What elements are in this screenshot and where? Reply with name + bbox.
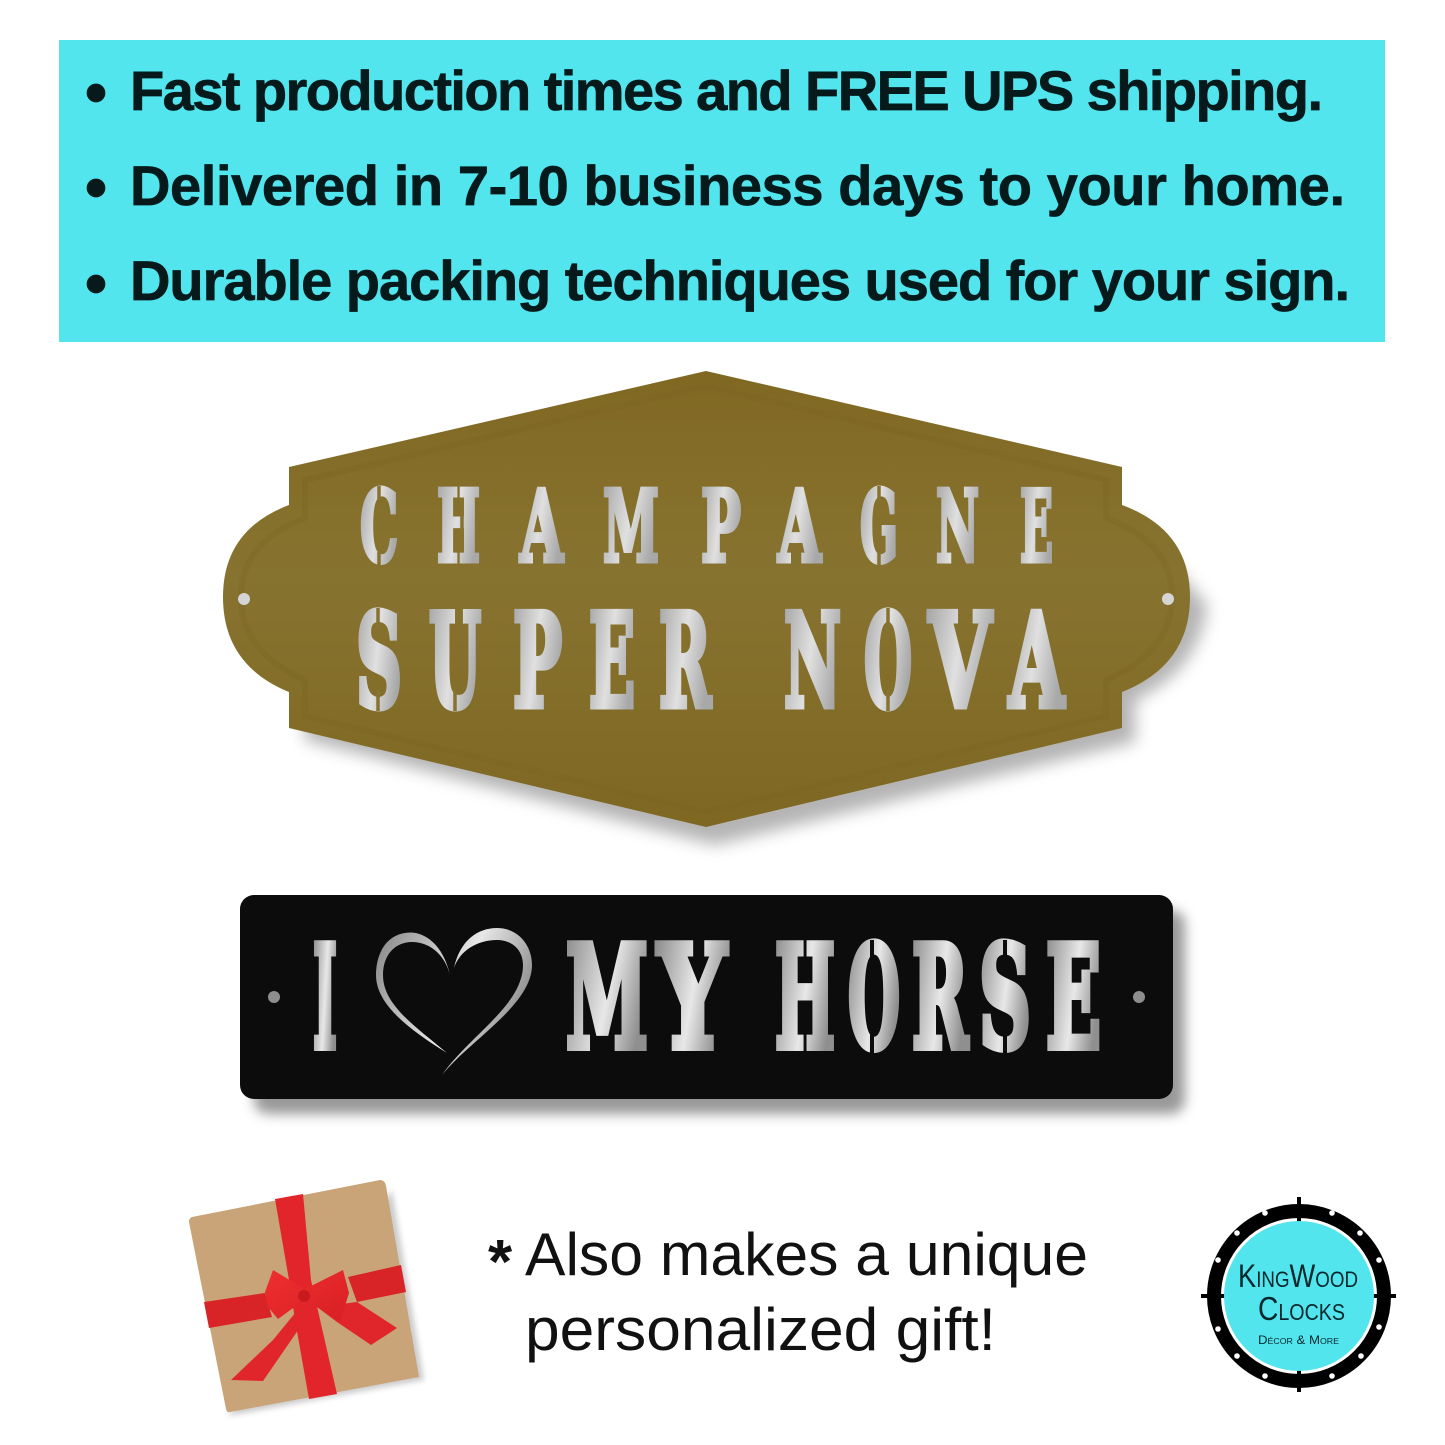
text: I MY HORSE: I <box>313 916 337 1081</box>
sign: I love my horse <box>240 895 1185 1114</box>
sign: Champagne Super Nova <box>223 371 1207 845</box>
logo: KingWood Clocks <box>1201 1197 1396 1392</box>
text: SUPER NOVA: E <box>589 587 635 737</box>
callout: gift note: * <box>488 1228 513 1297</box>
bullet list: Fast production times and FREE UPS shipping. <box>130 59 1323 122</box>
callout: gift note <box>488 1221 1088 1363</box>
text: I MY HORSE: O <box>848 916 900 1081</box>
text: CHAMPAGNE: P <box>701 470 741 585</box>
mounting holes <box>238 593 1174 605</box>
bow <box>231 1302 397 1381</box>
callout: gift note: Also makes a unique <box>525 1221 1088 1288</box>
text: I MY HORSE: R <box>912 916 968 1081</box>
text: CHAMPAGNE <box>360 470 1053 585</box>
text: CHAMPAGNE: H <box>437 470 480 585</box>
icon: heart <box>376 928 532 1075</box>
logo text: KingWood <box>1238 1258 1358 1294</box>
logo text: Décor & More <box>1258 1333 1339 1347</box>
text: CHAMPAGNE: C <box>360 470 398 585</box>
sign: Champagne Super Nova: E <box>1020 470 1053 585</box>
ribbon <box>275 1194 337 1399</box>
text: SUPER NOVA: R <box>659 587 712 737</box>
text: CHAMPAGNE: A <box>519 470 564 585</box>
text: SUPER NOVA: V <box>928 587 993 737</box>
text: CHAMPAGNE: G <box>860 470 898 585</box>
text: SUPER NOVA: U <box>429 587 481 737</box>
text: SUPER NOVA: O <box>864 587 912 737</box>
text: I MY HORSE: Y <box>657 916 727 1081</box>
text: CHAMPAGNE: N <box>936 470 979 585</box>
text: I MY HORSE: M <box>566 916 648 1081</box>
panel: shipping benefits <box>59 40 1385 342</box>
text: SUPER NOVA <box>356 587 1065 737</box>
text: SUPER NOVA: P <box>513 587 562 737</box>
callout: gift note: personalized gift! <box>525 1296 996 1363</box>
bullet list: Durable packing techniques used for your sign. <box>130 249 1350 312</box>
logo text <box>1238 1258 1358 1347</box>
mounting holes <box>268 991 1145 1003</box>
text: CHAMPAGNE: M <box>603 470 659 585</box>
text: I MY HORSE: S <box>979 916 1031 1081</box>
logo text: Clocks <box>1258 1290 1345 1327</box>
bullet list <box>87 59 1350 312</box>
text: I MY HORSE: E <box>1046 916 1101 1081</box>
text: SUPER NOVA: N <box>784 587 841 737</box>
text: SUPER NOVA: A <box>1008 587 1065 737</box>
ring dots <box>1215 1210 1382 1379</box>
icon: wrapped gift <box>189 1180 424 1416</box>
text: CHAMPAGNE: A <box>777 470 822 585</box>
bullet list: Delivered in 7-10 business days to your home. <box>130 154 1345 217</box>
text: I MY HORSE <box>313 916 1101 1081</box>
text: SUPER NOVA: S <box>356 587 402 737</box>
text: I MY HORSE: H <box>775 916 835 1081</box>
